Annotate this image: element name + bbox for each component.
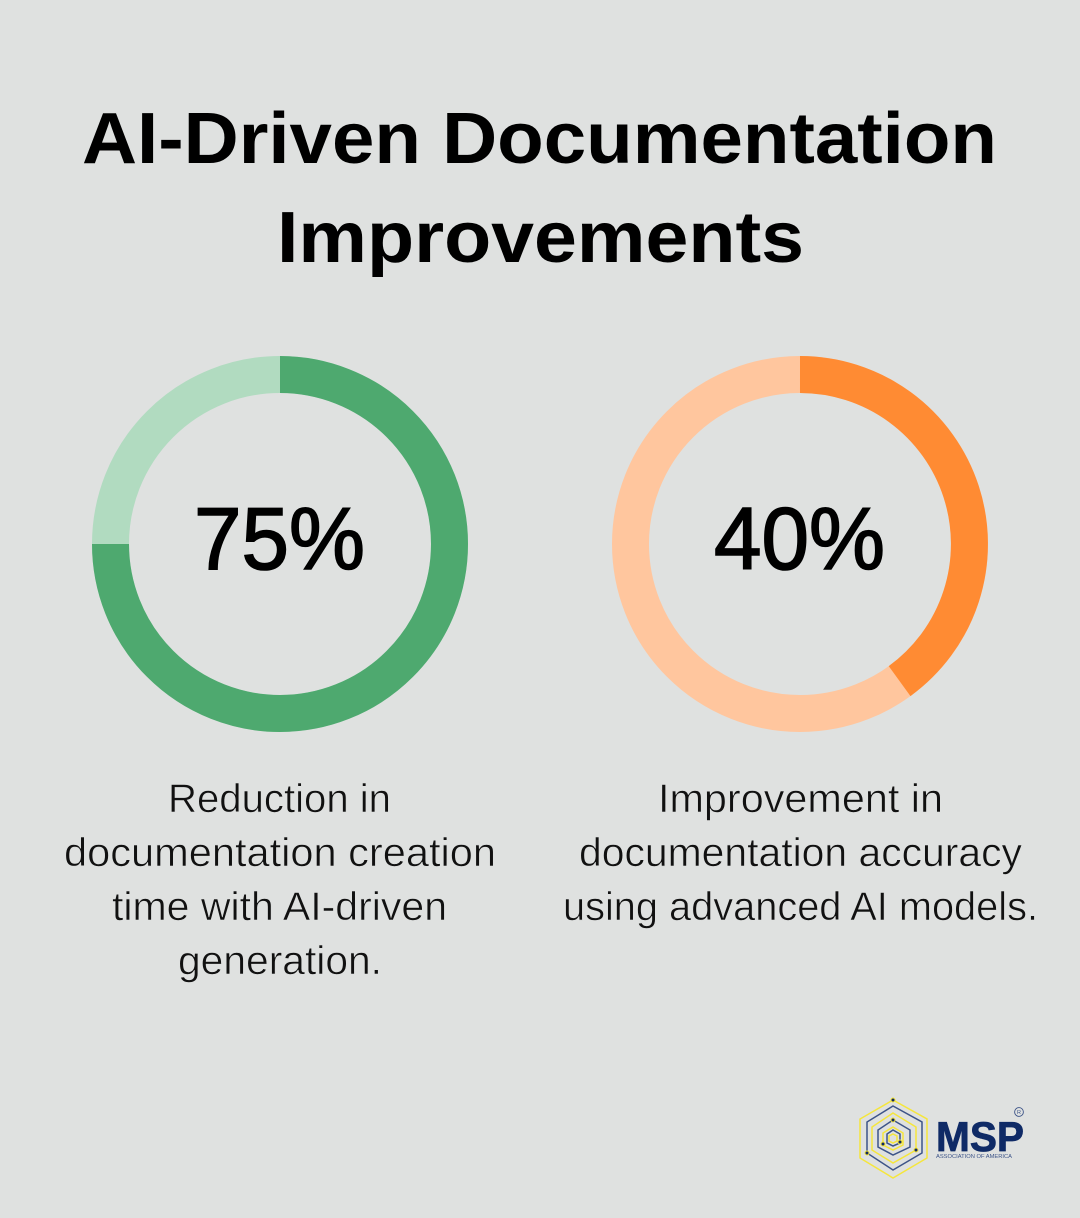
description: creation time: documentation creation xyxy=(64,831,496,875)
description: creation time: Reduction in xyxy=(168,777,391,821)
description: creation time: time with AI-driven xyxy=(112,885,447,929)
panel: 75 percent reduction xyxy=(64,374,496,983)
description: accuracy: documentation accuracy xyxy=(579,831,1022,875)
description: accuracy: Improvement in xyxy=(658,777,943,821)
description: accuracy: using advanced AI models. xyxy=(563,885,1038,929)
tagline: ASSOCIATION OF AMERICA xyxy=(936,1154,1012,1160)
registered mark xyxy=(1015,1108,1023,1116)
donut chart: 40% xyxy=(630,374,970,714)
donut chart: 75% xyxy=(110,374,450,714)
description: creation time: generation. xyxy=(178,939,382,983)
registered mark: R xyxy=(1017,1110,1021,1116)
wordmark: MSP xyxy=(936,1113,1024,1160)
panel: 40 percent improvement xyxy=(563,374,1038,929)
value: 40%: 40% xyxy=(714,489,885,588)
title xyxy=(82,99,997,278)
icon: hexagon circuit xyxy=(860,1098,927,1178)
title: Improvements xyxy=(277,198,804,278)
title: AI-Driven Documentation xyxy=(82,99,997,179)
description: accuracy xyxy=(563,777,1038,929)
description: creation time xyxy=(64,777,496,983)
logo: MSP Association of America xyxy=(860,1098,1024,1178)
value: 75%: 75% xyxy=(194,489,365,588)
